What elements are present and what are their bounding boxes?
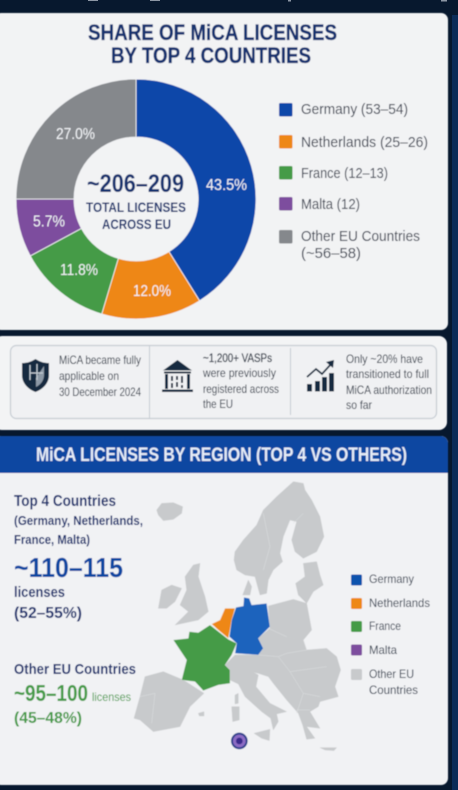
fact: VASPs registered: registered across <box>203 382 279 396</box>
donut legend <box>279 101 428 262</box>
donut center total: ACROSS EU <box>102 216 171 232</box>
fact: MiCA applicable date: applicable on <box>59 369 119 383</box>
other EU countries stats <box>14 661 136 727</box>
top 4 countries stats <box>14 493 143 622</box>
panel: share of MiCA licenses <box>0 13 448 330</box>
map legend: Germany <box>369 572 414 586</box>
donut center total: TOTAL LICENSES <box>86 199 186 215</box>
donut legend: Netherlands (25–26) <box>301 134 428 151</box>
fact: MiCA applicable date: MiCA became fully <box>59 353 141 367</box>
donut legend: Other EU Countries <box>301 228 420 245</box>
map legend: France <box>369 619 401 633</box>
donut chart: 11.8% <box>60 262 98 279</box>
donut chart: 12.0% <box>133 283 171 300</box>
top 4 countries stats: Top 4 Countries <box>14 493 116 510</box>
icon: bank building <box>162 360 193 392</box>
fact: MiCA applicable date: 30 December 2024 <box>59 385 141 399</box>
other EU countries stats: licenses <box>92 690 131 704</box>
donut legend: Malta (12) <box>301 196 360 213</box>
donut legend: (~56–58) <box>301 245 361 262</box>
top 4 countries stats: France, Malta) <box>14 532 90 547</box>
fact: VASPs registered: the EU <box>203 397 233 411</box>
top 4 countries stats: ~110–115 <box>14 552 123 583</box>
fact: authorization share: MiCA authorization <box>346 383 432 397</box>
icon: Malta marker <box>231 733 248 749</box>
top 4 countries stats: licenses <box>14 585 65 601</box>
panel: key facts <box>0 336 447 430</box>
fact: VASPs registered <box>202 351 279 411</box>
top 4 countries stats: (52–55%) <box>14 605 82 622</box>
fact: authorization share: Only ~20% have <box>346 352 423 366</box>
fact: authorization share: so far <box>346 398 372 412</box>
map legend: Malta <box>369 643 397 657</box>
region header band <box>0 436 448 473</box>
donut chart: 27.0% <box>56 126 95 143</box>
donut legend: Germany (53–54) <box>301 101 408 118</box>
heading: share of licenses: SHARE OF MiCA LICENSES <box>88 20 337 45</box>
other EU countries stats: (45–48%) <box>14 710 82 727</box>
top 4 countries stats: (Germany, Netherlands, <box>14 513 143 528</box>
map legend: Netherlands <box>369 596 430 610</box>
fact: MiCA applicable date <box>59 353 141 399</box>
map of Europe <box>134 482 341 751</box>
donut center total <box>86 170 186 232</box>
icon: shield <box>22 359 49 392</box>
icon: growth chart <box>307 360 334 392</box>
map legend: Countries <box>369 683 418 697</box>
map legend <box>351 572 430 697</box>
map legend: Other EU <box>369 667 414 681</box>
donut legend: France (12–13) <box>301 165 388 182</box>
fact: VASPs registered: were previously <box>202 366 276 380</box>
fact: authorization share <box>346 352 432 412</box>
other EU countries stats: ~95–100 <box>14 680 88 706</box>
heading: share of licenses: BY TOP 4 COUNTRIES <box>111 43 311 68</box>
panel: licenses by region <box>0 436 448 785</box>
donut chart: 5.7% <box>33 214 65 230</box>
donut chart <box>16 79 256 319</box>
donut chart: 43.5% <box>206 177 247 194</box>
heading: share of licenses <box>88 20 337 68</box>
other EU countries stats: Other EU Countries <box>14 661 136 678</box>
fact: VASPs registered: ~1,200+ VASPs <box>203 351 272 365</box>
donut center total: ~206–209 <box>87 170 184 198</box>
fact: authorization share: transitioned to full <box>346 367 429 381</box>
